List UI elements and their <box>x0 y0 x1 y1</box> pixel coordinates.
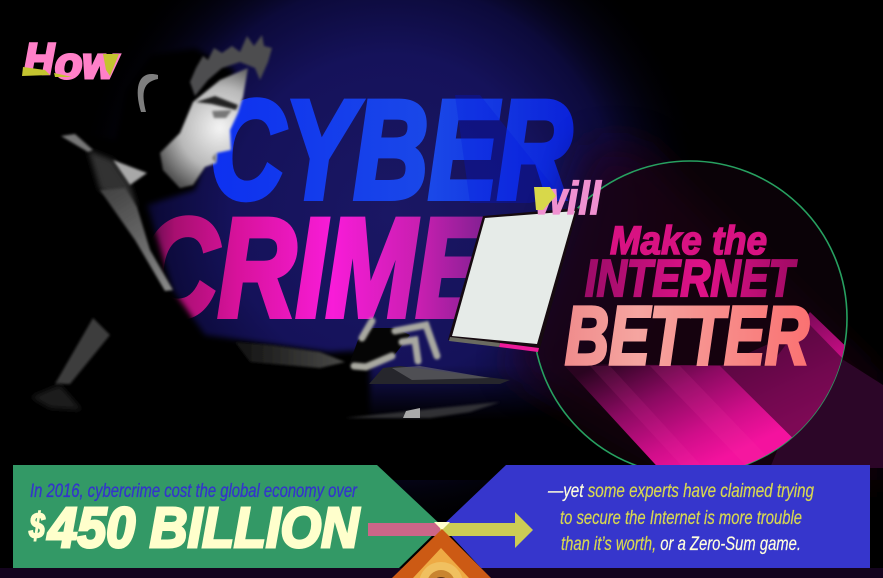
laptop screen <box>448 208 578 352</box>
icon: orange triangle with emblem <box>392 529 491 578</box>
statement text: than it’s worth, or a Zero-Sum game. <box>561 534 801 555</box>
circle outline <box>533 161 847 475</box>
title word: CYBER: CYBER <box>210 71 572 228</box>
forearm <box>235 342 345 368</box>
statement text <box>547 481 814 555</box>
panel: green statistic <box>13 465 442 568</box>
stat intro text: In 2016, cybercrime cost the global economy over <box>30 481 358 502</box>
keyboard <box>345 366 510 418</box>
maroon light beam <box>510 145 883 480</box>
word: will: will <box>535 172 602 224</box>
heading: Make the Internet Better: Make the <box>610 219 767 263</box>
word: How <box>22 35 120 88</box>
man silhouette <box>0 35 370 425</box>
heading: Make the Internet Better <box>565 219 809 382</box>
dark shadow outside the circle <box>770 345 883 468</box>
word: How: H <box>24 35 55 84</box>
long shadow of BETTER <box>563 312 844 465</box>
statement text: to secure the Internet is more trouble <box>560 508 802 529</box>
panel: blue statement <box>442 465 870 568</box>
sleeve print <box>55 318 110 384</box>
lower sleeve <box>31 385 82 410</box>
word: How: ow <box>55 39 120 88</box>
stat value: 450 BILLION <box>47 496 361 560</box>
collar and shoulder highlight <box>61 134 173 291</box>
face <box>160 68 248 188</box>
eyebrow shadow <box>196 96 238 110</box>
eye and mouth shading <box>212 110 232 163</box>
hand on the keyboard <box>350 321 437 368</box>
heading: Make the Internet Better: INTERNET <box>585 250 797 308</box>
title word: CRIME: CRIME <box>140 189 491 346</box>
statement text: —yet some experts have claimed trying <box>547 481 814 502</box>
ear <box>138 74 158 112</box>
body shadow <box>0 48 370 425</box>
stat value: $ <box>28 505 46 546</box>
arrow <box>368 512 533 548</box>
hair <box>190 35 272 96</box>
